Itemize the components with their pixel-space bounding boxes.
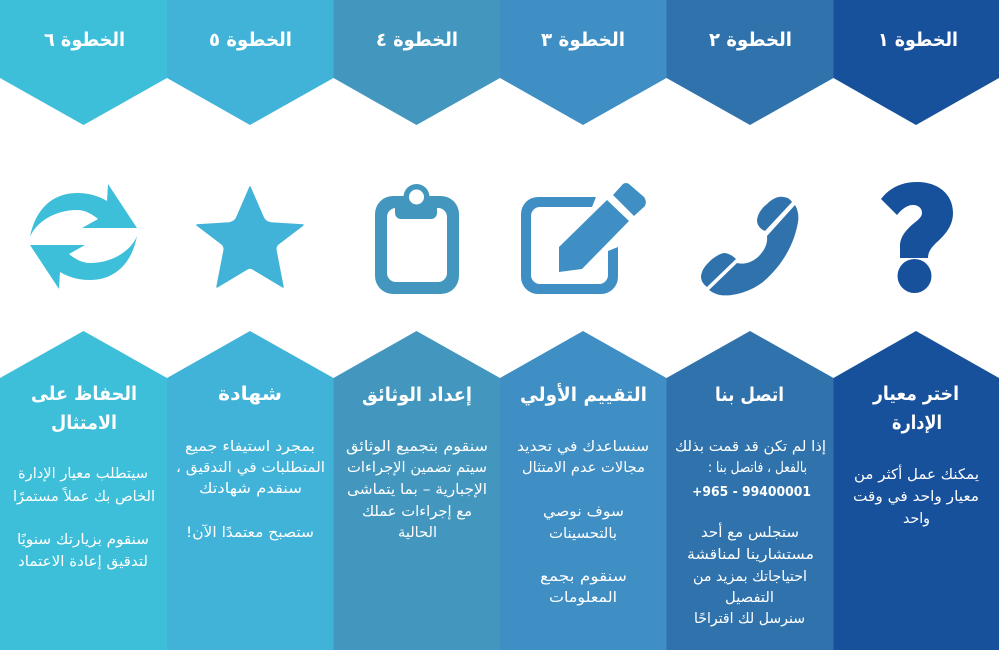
text block: step 2 body: احتياجاتك بمزيد من [693, 569, 807, 585]
heading: choose management standard: الإدارة [892, 412, 942, 434]
text block: step 4 body: الحالية [398, 525, 437, 541]
text block: step 3 body: سنساعدك في تحديد [517, 439, 649, 455]
text block: step 3 body: سوف نوصي [543, 504, 624, 520]
heading: step 2: الخطوة ٢ [709, 29, 792, 51]
icon: question mark [881, 182, 953, 293]
text block: step 4 body: الإجبارية – بما يتماشى [347, 482, 487, 498]
text block: step 2 body: مستشارينا لمناقشة [687, 547, 814, 563]
text block: step 2 body [675, 439, 826, 627]
icon: pencil and box [521, 183, 646, 294]
heading: initial assessment: التقييم الأولي [520, 383, 647, 406]
text block: step 5 body: سنقدم شهادتك [199, 481, 302, 497]
text block: step 3 body: سنقوم بجمع [540, 569, 627, 585]
heading: preparing documents: إعداد الوثائق [362, 384, 472, 406]
panel: step 3 details [500, 331, 666, 650]
text block: step 2 body: سنرسل لك اقتراحًا [694, 611, 805, 627]
panel: step 6 header [0, 0, 167, 125]
panel: step 2 details [666, 331, 834, 650]
text block: step 4 body: سيتم تضمين الإجراءات [347, 460, 487, 476]
text block: step 5 body [176, 439, 325, 541]
heading: choose management standard: اختر معيار [872, 383, 959, 405]
heading: step 4: الخطوة ٤ [376, 29, 458, 51]
icon: telephone [701, 197, 798, 295]
icon: refresh arrows [30, 184, 137, 289]
icon: star [197, 187, 303, 287]
heading: certificate: شهادة [218, 383, 282, 405]
text block: step 2 body: بالفعل ، فاتصل بنا : [708, 460, 807, 476]
text block: step 6 body: لتدقيق إعادة الاعتماد [18, 554, 148, 570]
text block: step 5 body: المتطلبات في التدقيق ، [176, 460, 325, 476]
text block: step 4 body: سنقوم بتجميع الوثائق [346, 439, 488, 455]
text block: step 2 body: +965 - 99400001 [692, 485, 811, 500]
panel: step 4 details [334, 331, 500, 650]
text block: step 5 body: بمجرد استيفاء جميع [185, 439, 315, 455]
heading: step 6: الخطوة ٦ [44, 29, 125, 51]
heading: choose management standard [872, 383, 959, 434]
text block: step 6 body: سيتطلب معيار الإدارة [18, 466, 148, 482]
text block: step 4 body: مع إجراءات عملك [362, 504, 472, 520]
text block: step 1 body [853, 464, 979, 527]
panel: step 3 header [500, 0, 666, 125]
icon: clipboard [375, 184, 459, 294]
heading: maintain compliance: الحفاظ على [31, 383, 137, 405]
text block: step 1 body: معيار واحد في وقت [853, 489, 979, 505]
text block: step 3 body: بالتحسينات [549, 526, 617, 542]
text block: step 1 body: يمكنك عمل أكثر من [854, 464, 979, 483]
text block: step 3 body: المعلومات [549, 590, 617, 606]
text block: step 4 body [346, 439, 488, 541]
text block: step 2 body: إذا لم تكن قد قمت بذلك [675, 439, 826, 455]
heading: step 3: الخطوة ٣ [541, 29, 625, 51]
panel: step 1 details [834, 331, 999, 650]
panel: step 2 header [666, 0, 834, 125]
panel: step 5 header [167, 0, 334, 125]
panel: step 1 header [834, 0, 999, 125]
text block: step 6 body: الخاص بك عملاً مستمرًا [13, 487, 155, 505]
heading: contact us: اتصل بنا [715, 384, 784, 406]
text block: step 2 body: ستجلس مع أحد [701, 522, 799, 541]
text block: step 6 body: سنقوم بزيارتك سنويًا [17, 532, 149, 548]
heading: step 5: الخطوة ٥ [209, 29, 292, 51]
heading: maintain compliance [31, 383, 137, 434]
panel: step 4 header [334, 0, 500, 125]
heading: step 1: الخطوة ١ [878, 29, 958, 51]
text block: step 3 body: مجالات عدم الامتثال [522, 460, 645, 476]
text block: step 1 body: واحد [903, 511, 930, 527]
panel: step 6 details [0, 331, 167, 650]
heading: maintain compliance: الامتثال [51, 412, 117, 434]
panel: step 5 details [167, 331, 334, 650]
text block: step 6 body [13, 466, 155, 570]
text block: step 5 body: ستصبح معتمدًا الآن! [186, 524, 314, 541]
text block: step 3 body [517, 439, 649, 606]
text block: step 2 body: التفصيل [725, 590, 774, 606]
